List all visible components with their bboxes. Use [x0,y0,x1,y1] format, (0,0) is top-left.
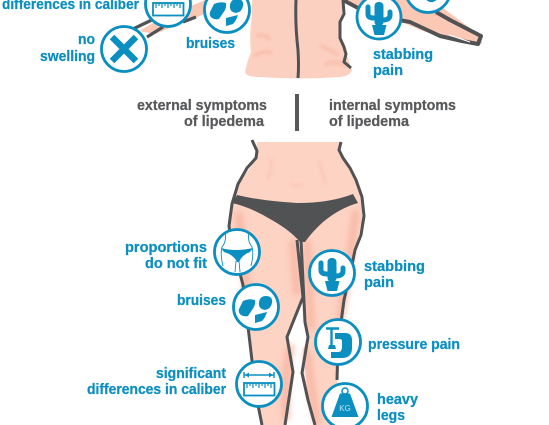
icon: heavy weight: KG [339,404,351,413]
label: no swelling [40,32,95,65]
label: no swelling: swelling [40,49,95,65]
outline left [229,140,262,425]
heading: external symptoms: of lipedema [184,114,265,130]
label: proportions do not fit: do not fit [145,256,207,272]
outline right [337,142,364,380]
icon: stabbing pain top [357,0,401,39]
label: bruises lower: bruises [177,293,226,309]
icon: stabbing pain lower [310,250,354,296]
heading: external symptoms: external symptoms [137,98,267,114]
label: heavy legs: legs [377,408,405,424]
icon: bruises top [204,0,250,32]
spine line [296,0,298,78]
icon: pressure clamp [316,320,360,364]
skin [230,142,362,425]
icon: ruler top [146,0,190,26]
underwear [232,194,358,242]
lower body figure [229,140,364,425]
icon: ruler lower [236,362,282,406]
label: stabbing pain lower [364,259,425,291]
heading: internal symptoms [329,98,456,130]
right torso outline [340,0,351,68]
icon: no swelling cross [102,26,146,72]
label: no swelling: no [78,32,95,48]
label: heavy legs [377,392,418,424]
heading: external symptoms [137,98,267,130]
left arm [139,0,232,34]
label: significant differences in caliber [87,366,226,398]
heading: internal symptoms: of lipedema [329,114,410,130]
label: pressure pain: pressure pain [368,337,460,353]
inner leg outlines [285,240,315,425]
torso back [245,0,352,78]
label: significant differences in caliber: significant [156,366,226,382]
label: stabbing pain lower: pain [364,275,394,291]
label: stabbing pain lower: stabbing [364,259,425,275]
label: stabbing pain top: pain [373,63,403,79]
label: significant differences in caliber: differences in caliber [87,382,226,398]
right arm [343,0,482,44]
icon: heavy weight [322,384,368,425]
icon: proportions [214,230,260,274]
label: bruises top: bruises [186,36,235,52]
label: stabbing pain top [373,47,433,79]
divider bar [295,94,299,131]
label: proportions do not fit: proportions [125,240,207,256]
label: proportions do not fit [125,240,207,272]
heading: internal symptoms: internal symptoms [329,98,456,114]
upper body figure [133,0,482,78]
icon: bruises lower [234,284,278,330]
label: stabbing pain top: stabbing [373,47,433,63]
label: heavy legs: heavy [377,392,418,408]
icon: pressure pain top, cropped [406,0,450,12]
